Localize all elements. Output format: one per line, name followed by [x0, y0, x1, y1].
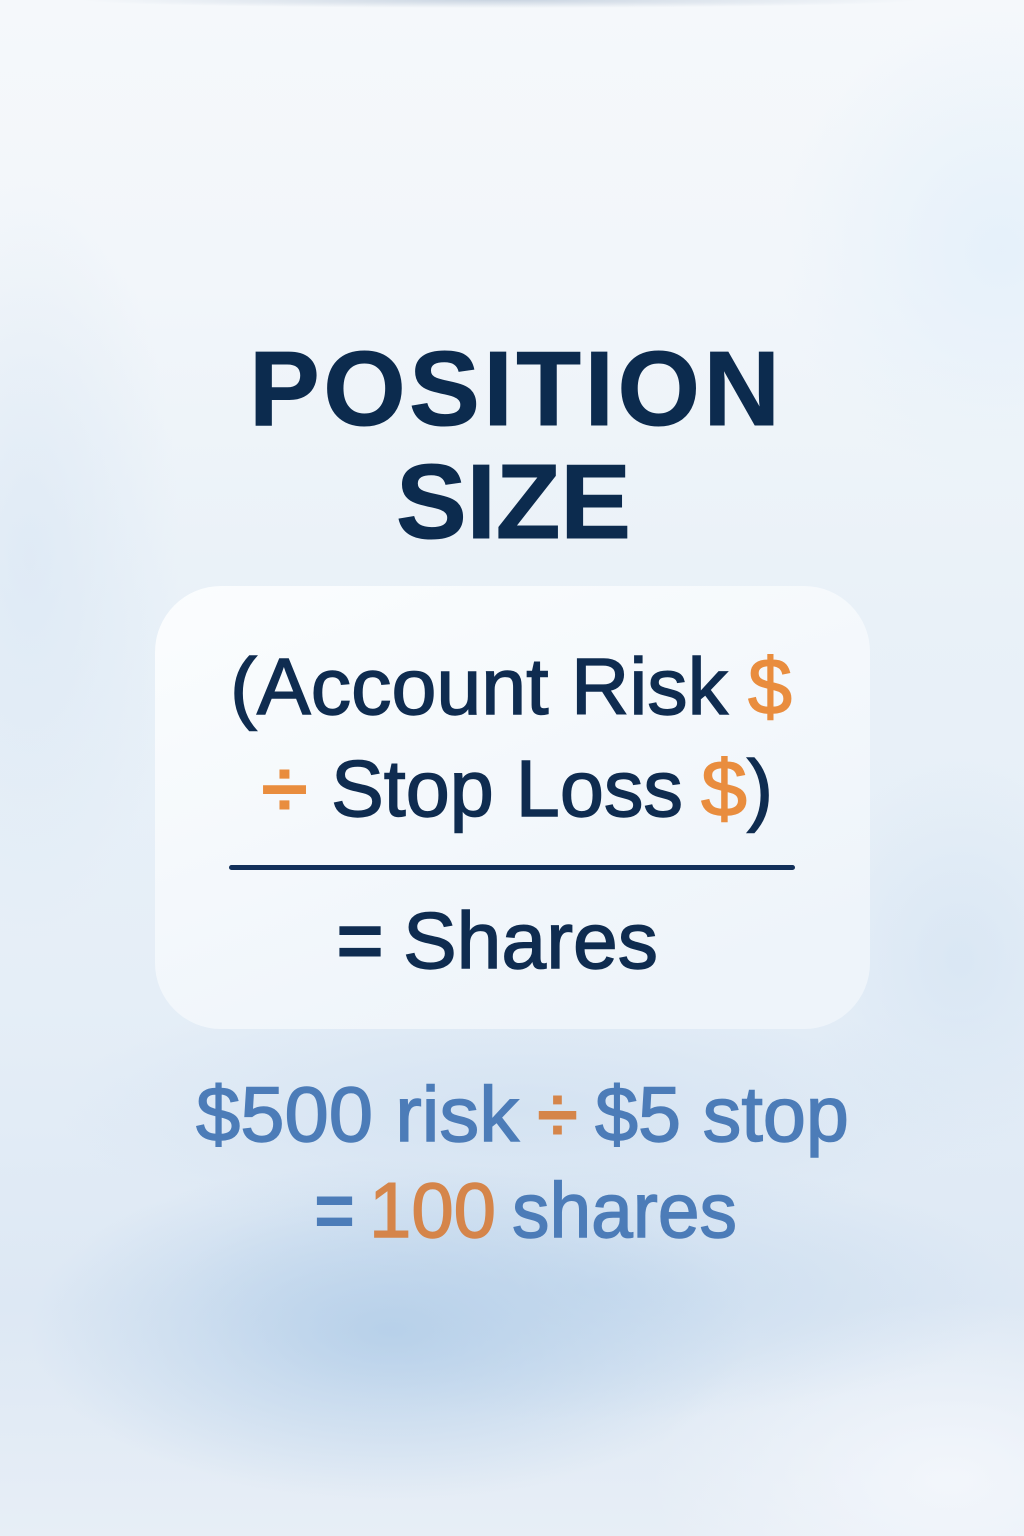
example calculation: [196, 1070, 849, 1254]
example line 2: =: [314, 1166, 355, 1254]
formula line 2: Stop Loss: [331, 744, 683, 833]
formula line 2: ): [747, 744, 773, 833]
formula line 2: ÷: [261, 744, 308, 833]
title: SIZE: [396, 443, 631, 561]
example line 2: 100: [369, 1166, 496, 1254]
formula line 1: $: [748, 642, 792, 731]
panel: formula card: [155, 586, 870, 1029]
formula result: =: [336, 896, 384, 985]
fraction divider: [229, 865, 795, 870]
title: POSITION: [249, 330, 780, 448]
example line 1: [196, 1070, 849, 1158]
example line 1: $500 risk: [196, 1070, 520, 1158]
formula line 1: (Account Risk: [230, 642, 729, 731]
example line 1: ÷: [537, 1070, 578, 1158]
example line 2: shares: [512, 1166, 737, 1254]
title: [249, 330, 780, 561]
example line 2: [314, 1166, 737, 1254]
formula result: Shares: [403, 896, 658, 985]
example line 1: $5 stop: [595, 1070, 849, 1158]
formula line 2: [261, 744, 773, 833]
formula line 2: $: [701, 744, 747, 833]
